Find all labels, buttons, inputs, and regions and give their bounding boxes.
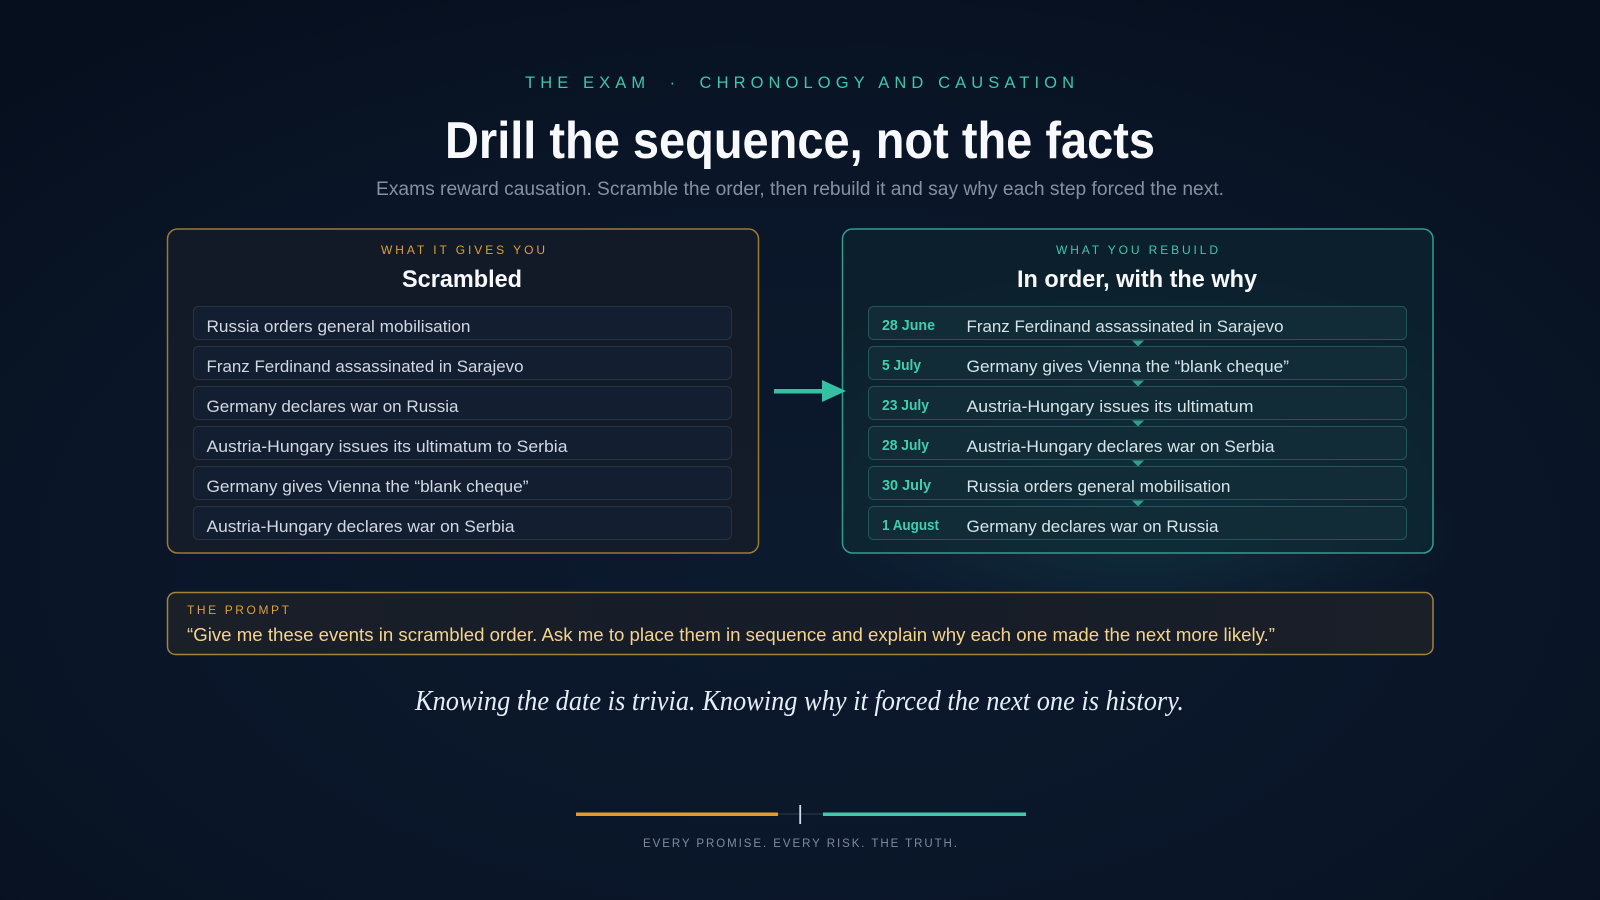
timeline row 2: Germany gives Vienna the “blank cheque” — [966, 357, 1289, 376]
timeline row 6: 1 August — [882, 517, 939, 534]
timeline row 6: Germany declares war on Russia — [966, 517, 1219, 536]
timeline row 2 — [868, 346, 1406, 380]
callout: the prompt — [168, 592, 1433, 654]
title: Drill the sequence, not the facts — [445, 112, 1155, 170]
subtitle: Exams reward causation. Scramble the order, then rebuild it and say why each step forced the next. — [376, 179, 1224, 200]
scrambled row 5: Germany gives Vienna the “blank cheque” — [206, 477, 529, 496]
timeline row 4: 28 July — [882, 437, 930, 454]
scrambled row 1: Russia orders general mobilisation — [206, 317, 470, 336]
closing quote: Knowing the date is trivia. Knowing why it forced the next one is history. — [414, 686, 1184, 717]
connector 3 — [1132, 420, 1144, 426]
timeline row 5 — [868, 466, 1406, 500]
scrambled row 5 — [194, 466, 732, 500]
panel heading: scrambled: Scrambled — [402, 266, 522, 293]
scrambled row 1 — [194, 306, 732, 340]
arrow: scrambled to ordered — [774, 380, 846, 402]
panel label: what you rebuild: WHAT YOU REBUILD — [1056, 243, 1218, 257]
panel: scrambled — [168, 229, 758, 553]
timeline row 1 — [868, 306, 1406, 340]
timeline row 5: Russia orders general mobilisation — [966, 477, 1230, 496]
timeline row 4: Austria-Hungary declares war on Serbia — [966, 437, 1275, 456]
panel: in order — [842, 229, 1433, 553]
eyebrow: THE EXAM · CHRONOLOGY AND CAUSATION — [525, 74, 1074, 92]
footer rule — [576, 805, 1026, 824]
connector 1 — [1132, 340, 1144, 346]
connector 5 — [1132, 500, 1144, 506]
callout label: THE PROMPT — [187, 603, 290, 617]
callout text: “Give me these events in scrambled order. Ask me to place them in sequence and explain why each one made the next more likely.” — [187, 624, 1275, 645]
scrambled row 6: Austria-Hungary declares war on Serbia — [206, 517, 515, 536]
scrambled row 2 — [194, 346, 732, 380]
scrambled row 3: Germany declares war on Russia — [206, 397, 459, 416]
connector 2 — [1132, 380, 1144, 386]
connector 4 — [1132, 460, 1144, 466]
scrambled row 4 — [194, 426, 732, 460]
scrambled row 6 — [194, 506, 732, 540]
panel heading: in order, with the why: In order, with the why — [1017, 266, 1258, 293]
scrambled row 2: Franz Ferdinand assassinated in Sarajevo — [206, 357, 524, 376]
timeline row 5: 30 July — [882, 477, 932, 494]
timeline row 3 — [868, 386, 1406, 420]
timeline row 1: 28 June — [882, 317, 935, 334]
scrambled row 4: Austria-Hungary issues its ultimatum to Serbia — [206, 437, 568, 456]
scrambled row 3 — [194, 386, 732, 420]
timeline row 3: Austria-Hungary issues its ultimatum — [966, 397, 1254, 416]
footer tagline: EVERY PROMISE. EVERY RISK. THE TRUTH. — [643, 838, 957, 850]
timeline row 4 — [868, 426, 1406, 460]
timeline row 3: 23 July — [882, 397, 930, 414]
timeline row 1: Franz Ferdinand assassinated in Sarajevo — [966, 317, 1284, 336]
timeline row 2: 5 July — [882, 357, 922, 374]
panel label: what it gives you: WHAT IT GIVES YOU — [381, 243, 545, 257]
timeline row 6 — [868, 506, 1406, 540]
